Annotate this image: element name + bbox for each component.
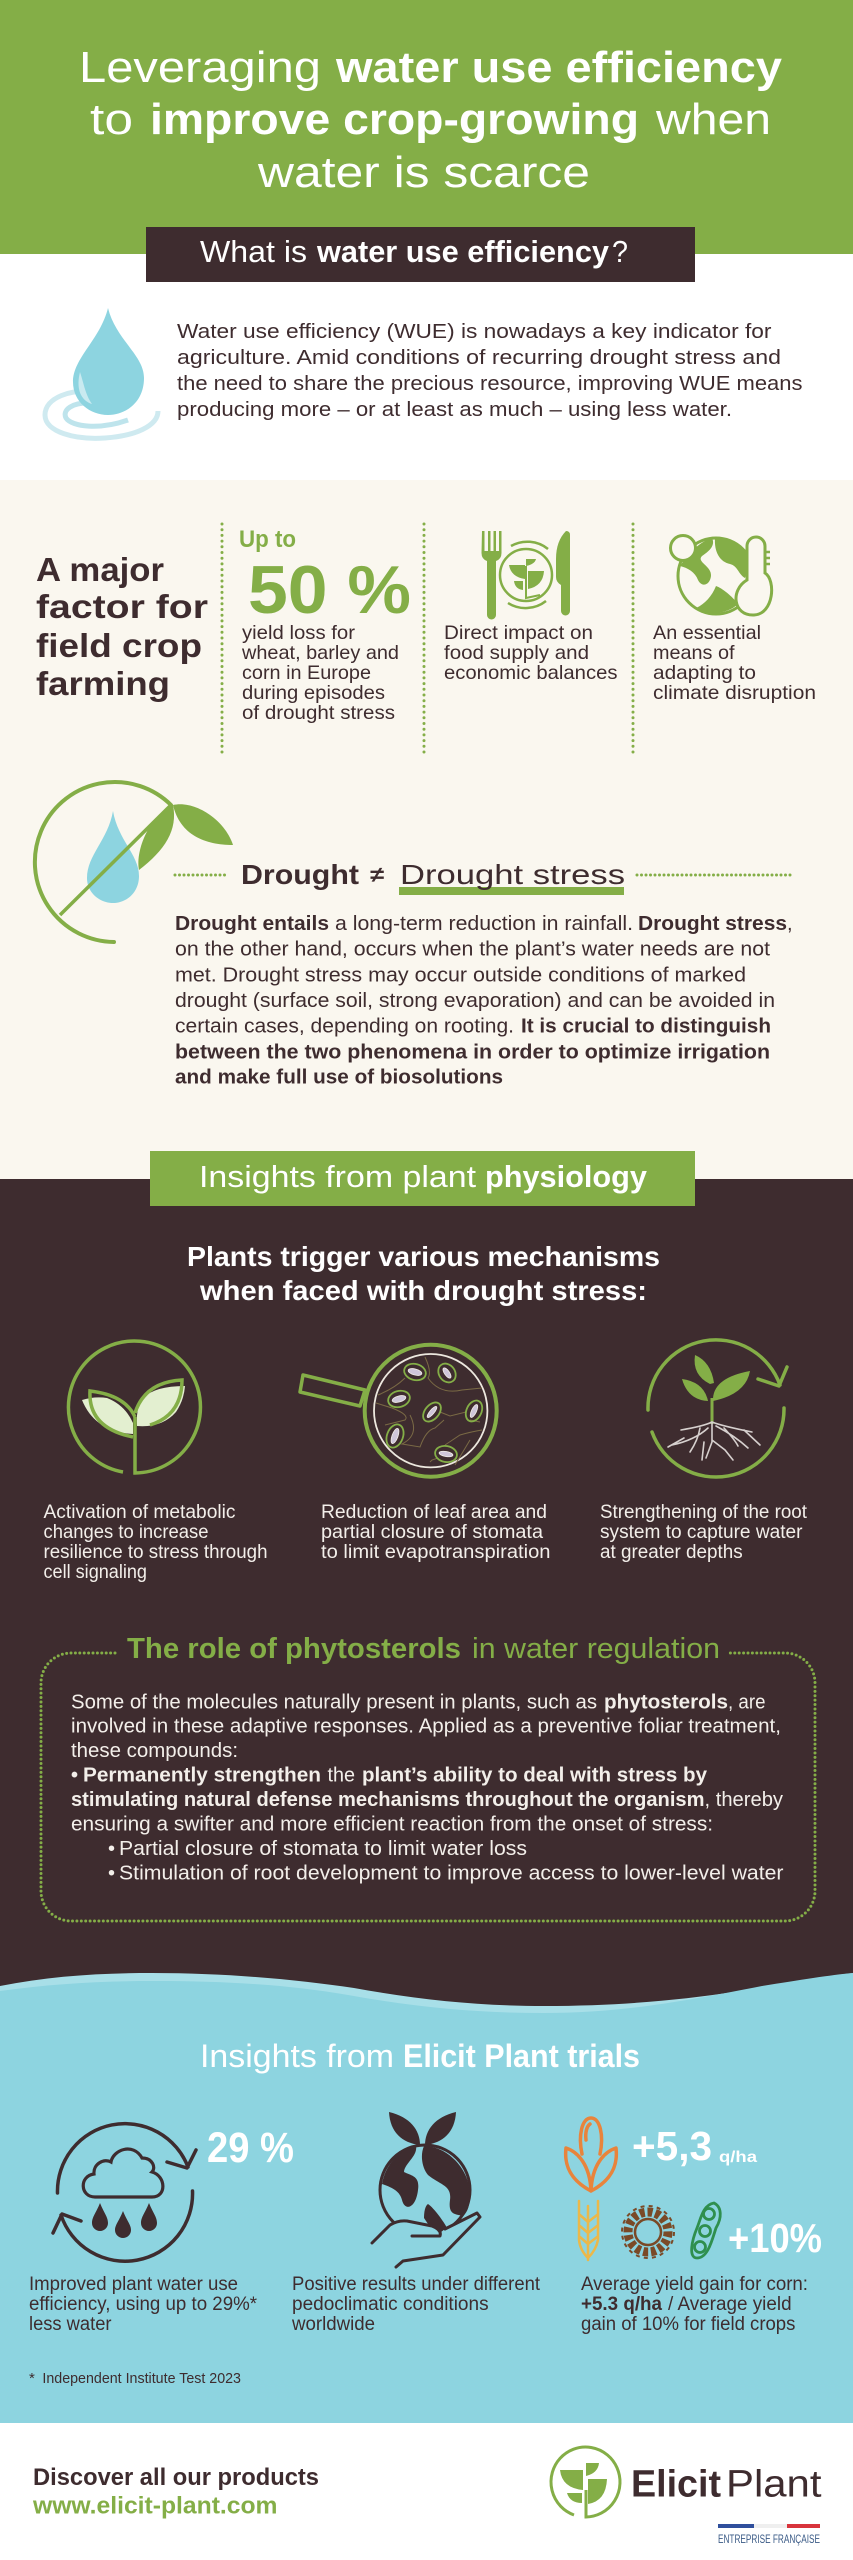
text block: phytosterols explanation: Permanently strengthen xyxy=(83,1765,321,1787)
text block: phytosterols explanation: these compounds: xyxy=(71,1740,238,1762)
heading: what is water use efficiency: What is xyxy=(200,235,307,269)
text block: pedoclimatic results xyxy=(291,2274,541,2335)
text block: pedoclimatic results: Positive results under different xyxy=(292,2274,541,2295)
text block: average yield gain: gain of 10% for field crops xyxy=(581,2314,795,2335)
stat: 50 percent yield loss: yield loss for xyxy=(242,622,356,644)
icon: wheat xyxy=(579,2201,598,2260)
stat: 50 percent yield loss: Up to xyxy=(239,526,296,553)
text block: phytosterols explanation: phytosterols xyxy=(604,1691,728,1713)
footnote: Independent Institute Test 2023 xyxy=(42,2370,241,2387)
logo: Elicit Plant: Plant xyxy=(726,2464,822,2506)
text block: phytosterols explanation: Stimulation of root development to improve access to lower-level water xyxy=(119,1862,784,1884)
heading: insights from plant physiology: Insights from plant xyxy=(199,1160,477,1194)
stat: corn yield gain: q/ha xyxy=(719,2149,757,2166)
call to action xyxy=(32,2464,319,2520)
text block: water use efficiency result: Improved plant water use xyxy=(29,2274,238,2295)
heading: insights from trials xyxy=(200,2038,640,2074)
stat: 29 percent: 29 % xyxy=(207,2124,294,2172)
badge: entreprise francaise xyxy=(718,2524,820,2546)
heading: insights from trials: Elicit Plant trials xyxy=(403,2038,640,2074)
text block: drought explanation: met. Drought stress may occur outside conditions of marked xyxy=(175,964,746,986)
icon: corn xyxy=(566,2118,616,2191)
text block: leaf area reduction: Reduction of leaf area and xyxy=(321,1502,547,1523)
heading: insights from plant physiology: physiology xyxy=(485,1160,647,1194)
heading: drought vs drought stress: Drought xyxy=(241,859,359,890)
heading: a major factor: factor for xyxy=(36,588,208,625)
text block: metabolic changes xyxy=(44,1502,268,1583)
text block: drought explanation: Drought stress xyxy=(638,913,787,935)
text block: pedoclimatic results: worldwide xyxy=(291,2314,375,2335)
logo: Elicit Plant: Elicit xyxy=(631,2464,721,2506)
text block: climate adaptation: adapting to xyxy=(653,662,756,684)
title xyxy=(79,43,783,197)
title: water use efficiency xyxy=(335,43,783,92)
text block: average yield gain xyxy=(581,2274,808,2335)
text block: leaf area reduction: to limit evapotranspiration xyxy=(321,1542,550,1563)
panel: trials wave background xyxy=(0,1973,853,2423)
stat: 50 percent yield loss: wheat, barley and xyxy=(241,642,399,664)
stat: 50 percent yield loss xyxy=(239,526,411,724)
icon: plate fork and knife xyxy=(482,531,570,620)
title: Leveraging xyxy=(79,43,321,92)
text block: drought explanation: It is crucial to distinguish xyxy=(521,1016,771,1038)
text block: leaf area reduction xyxy=(321,1502,550,1563)
text block: phytosterols explanation: Partial closure of stomata to limit water loss xyxy=(119,1838,527,1860)
text block: WUE definition: Water use efficiency (WUE) is nowadays a key indicator for xyxy=(177,321,772,343)
panel: plant physiology background xyxy=(0,1179,853,2030)
heading: drought vs drought stress: ≠ xyxy=(370,862,384,887)
text block: climate adaptation: means of xyxy=(653,642,735,664)
text block: drought explanation: on the other hand, occurs when the plant’s water needs are not xyxy=(175,939,770,961)
heading: a major factor: field crop xyxy=(36,627,202,664)
heading: what is water use efficiency: water use efficiency xyxy=(316,235,609,269)
heading: role of phytosterols: in water regulation xyxy=(472,1633,720,1665)
text block: drought explanation: , xyxy=(787,913,793,935)
title: when xyxy=(655,95,771,144)
text block: drought explanation: certain cases, depending on rooting. xyxy=(175,1016,514,1038)
text block: WUE definition: agriculture. Amid conditions of recurring drought stress and xyxy=(177,347,781,369)
heading: insights from trials: Insights from xyxy=(200,2038,394,2074)
heading: plants trigger mechanisms: when faced with drought stress: xyxy=(199,1275,647,1306)
text block: phytosterols explanation: the xyxy=(328,1765,355,1787)
heading: plants trigger mechanisms: Plants trigger various mechanisms xyxy=(187,1241,660,1272)
icon: plant with roots and cycle arrow xyxy=(648,1340,787,1477)
text block: phytosterols explanation: ensuring a swifter and more efficient reaction from the onset of stress: xyxy=(71,1814,713,1836)
logo: Elicit Plant xyxy=(551,2447,822,2546)
text block: WUE definition xyxy=(177,321,802,421)
icon: globe in hand xyxy=(372,2112,480,2267)
text block: phytosterols explanation: involved in these adaptive responses. Applied as a preventive foliar treatment, xyxy=(71,1716,781,1738)
text block: phytosterols explanation: stimulating natural defense mechanisms throughout the organism xyxy=(71,1789,704,1811)
stat: field crops gain: +10% xyxy=(728,2215,822,2261)
title: to xyxy=(90,95,133,144)
text block: direct impact: economic balances xyxy=(444,662,618,684)
heading: drought vs drought stress: Drought stress xyxy=(400,859,625,890)
text block: drought explanation xyxy=(175,913,793,1089)
text block: phytosterols explanation: • xyxy=(71,1765,78,1787)
text block: phytosterols explanation: , are xyxy=(728,1691,766,1713)
stat: 50 percent yield loss: corn in Europe xyxy=(242,662,371,684)
text block: phytosterols explanation: Some of the molecules naturally present in plants, such as xyxy=(71,1691,597,1713)
heading: plants trigger mechanisms xyxy=(187,1241,660,1306)
text block: drought explanation: Drought entails xyxy=(175,913,329,935)
heading: what is water use efficiency: ? xyxy=(612,235,628,269)
text block: water use efficiency result xyxy=(29,2274,258,2335)
text block: drought explanation: between the two phenomena in order to optimize irrigation xyxy=(175,1041,770,1063)
icon: sprout in circle xyxy=(68,1341,200,1473)
icon: water drop xyxy=(45,308,158,438)
heading: role of phytosterols: The role of phytosterols xyxy=(127,1633,461,1665)
text block: phytosterols explanation: • xyxy=(108,1862,115,1884)
text block: phytosterols explanation: • xyxy=(108,1838,115,1860)
icon: sunflower xyxy=(622,2206,674,2258)
panel: title header xyxy=(0,0,853,254)
text block: metabolic changes: cell signaling xyxy=(44,1562,147,1583)
text block: direct impact: food supply and xyxy=(444,642,589,664)
text block: root strengthening: at greater depths xyxy=(600,1542,743,1563)
heading: drought vs drought stress xyxy=(175,859,792,895)
heading: a major factor: A major xyxy=(36,551,164,588)
footnote: * xyxy=(29,2370,35,2387)
panel: footer xyxy=(0,2423,853,2560)
text block: drought explanation: a long-term reduction in rainfall. xyxy=(335,913,633,935)
text block: metabolic changes: changes to increase xyxy=(44,1522,208,1543)
heading: role of phytosterols xyxy=(127,1633,720,1665)
text block: pedoclimatic results: pedoclimatic conditions xyxy=(292,2294,489,2315)
text block: drought explanation: and make full use of biosolutions xyxy=(175,1067,503,1089)
call to action: www.elicit-plant.com xyxy=(32,2493,278,2520)
text block: phytosterols explanation: , thereby xyxy=(704,1789,783,1811)
text block: drought explanation: drought (surface soil, strong evaporation) and can be avoided in xyxy=(175,990,775,1012)
text block: WUE definition: producing more – or at least as much – using less water. xyxy=(177,399,732,421)
title: improve crop-growing xyxy=(150,95,639,144)
title: water is scarce xyxy=(257,148,590,197)
text block: water use efficiency result: efficiency, using up to 29%* xyxy=(29,2294,258,2315)
icon: rain cloud cycle xyxy=(53,2124,196,2261)
text block: climate adaptation: climate disruption xyxy=(653,682,816,704)
text block: climate adaptation: An essential xyxy=(653,622,761,644)
icon: crossed water drop and leaves xyxy=(35,782,233,942)
icon: pea pod xyxy=(692,2203,720,2258)
text block: phytosterols explanation xyxy=(71,1691,784,1884)
text block: direct impact: Direct impact on xyxy=(444,622,593,644)
panel: role of phytosterols xyxy=(41,1633,815,1921)
text block: water use efficiency result: less water xyxy=(29,2314,112,2335)
heading: what is water use efficiency xyxy=(146,227,695,282)
text block: metabolic changes: Activation of metabolic xyxy=(44,1502,236,1523)
heading: a major factor xyxy=(36,551,208,702)
text block: phytosterols explanation: plant’s ability to deal with stress by xyxy=(362,1765,708,1787)
text block: average yield gain: Average yield gain for corn: xyxy=(581,2274,808,2295)
text block: WUE definition: the need to share the precious resource, improving WUE means xyxy=(177,373,802,395)
heading: a major factor: farming xyxy=(36,665,170,702)
text block: average yield gain: / Average yield xyxy=(668,2294,792,2315)
text block: average yield gain: +5.3 q/ha xyxy=(581,2294,662,2315)
stat: 50 percent yield loss: 50 % xyxy=(248,552,411,628)
heading: insights from plant physiology xyxy=(150,1151,695,1206)
text block: direct impact xyxy=(444,622,618,684)
text block: root strengthening xyxy=(600,1502,808,1563)
text block: root strengthening: system to capture water xyxy=(600,1522,803,1543)
icon: magnifier on stomata xyxy=(300,1345,497,1477)
text block: climate adaptation xyxy=(653,622,816,704)
text block: root strengthening: Strengthening of the root xyxy=(600,1502,808,1523)
icon: globe and thermometer xyxy=(670,536,772,615)
stat: 50 percent yield loss: of drought stress xyxy=(242,702,395,724)
stat: 50 percent yield loss: during episodes xyxy=(242,682,385,704)
text block: leaf area reduction: partial closure of stomata xyxy=(321,1522,543,1543)
stat: corn yield gain xyxy=(632,2123,757,2169)
call to action: Discover all our products xyxy=(33,2464,319,2491)
panel: cream section xyxy=(0,480,853,1179)
text block: metabolic changes: resilience to stress through xyxy=(44,1542,268,1563)
stat: corn yield gain: +5,3 xyxy=(632,2123,712,2169)
